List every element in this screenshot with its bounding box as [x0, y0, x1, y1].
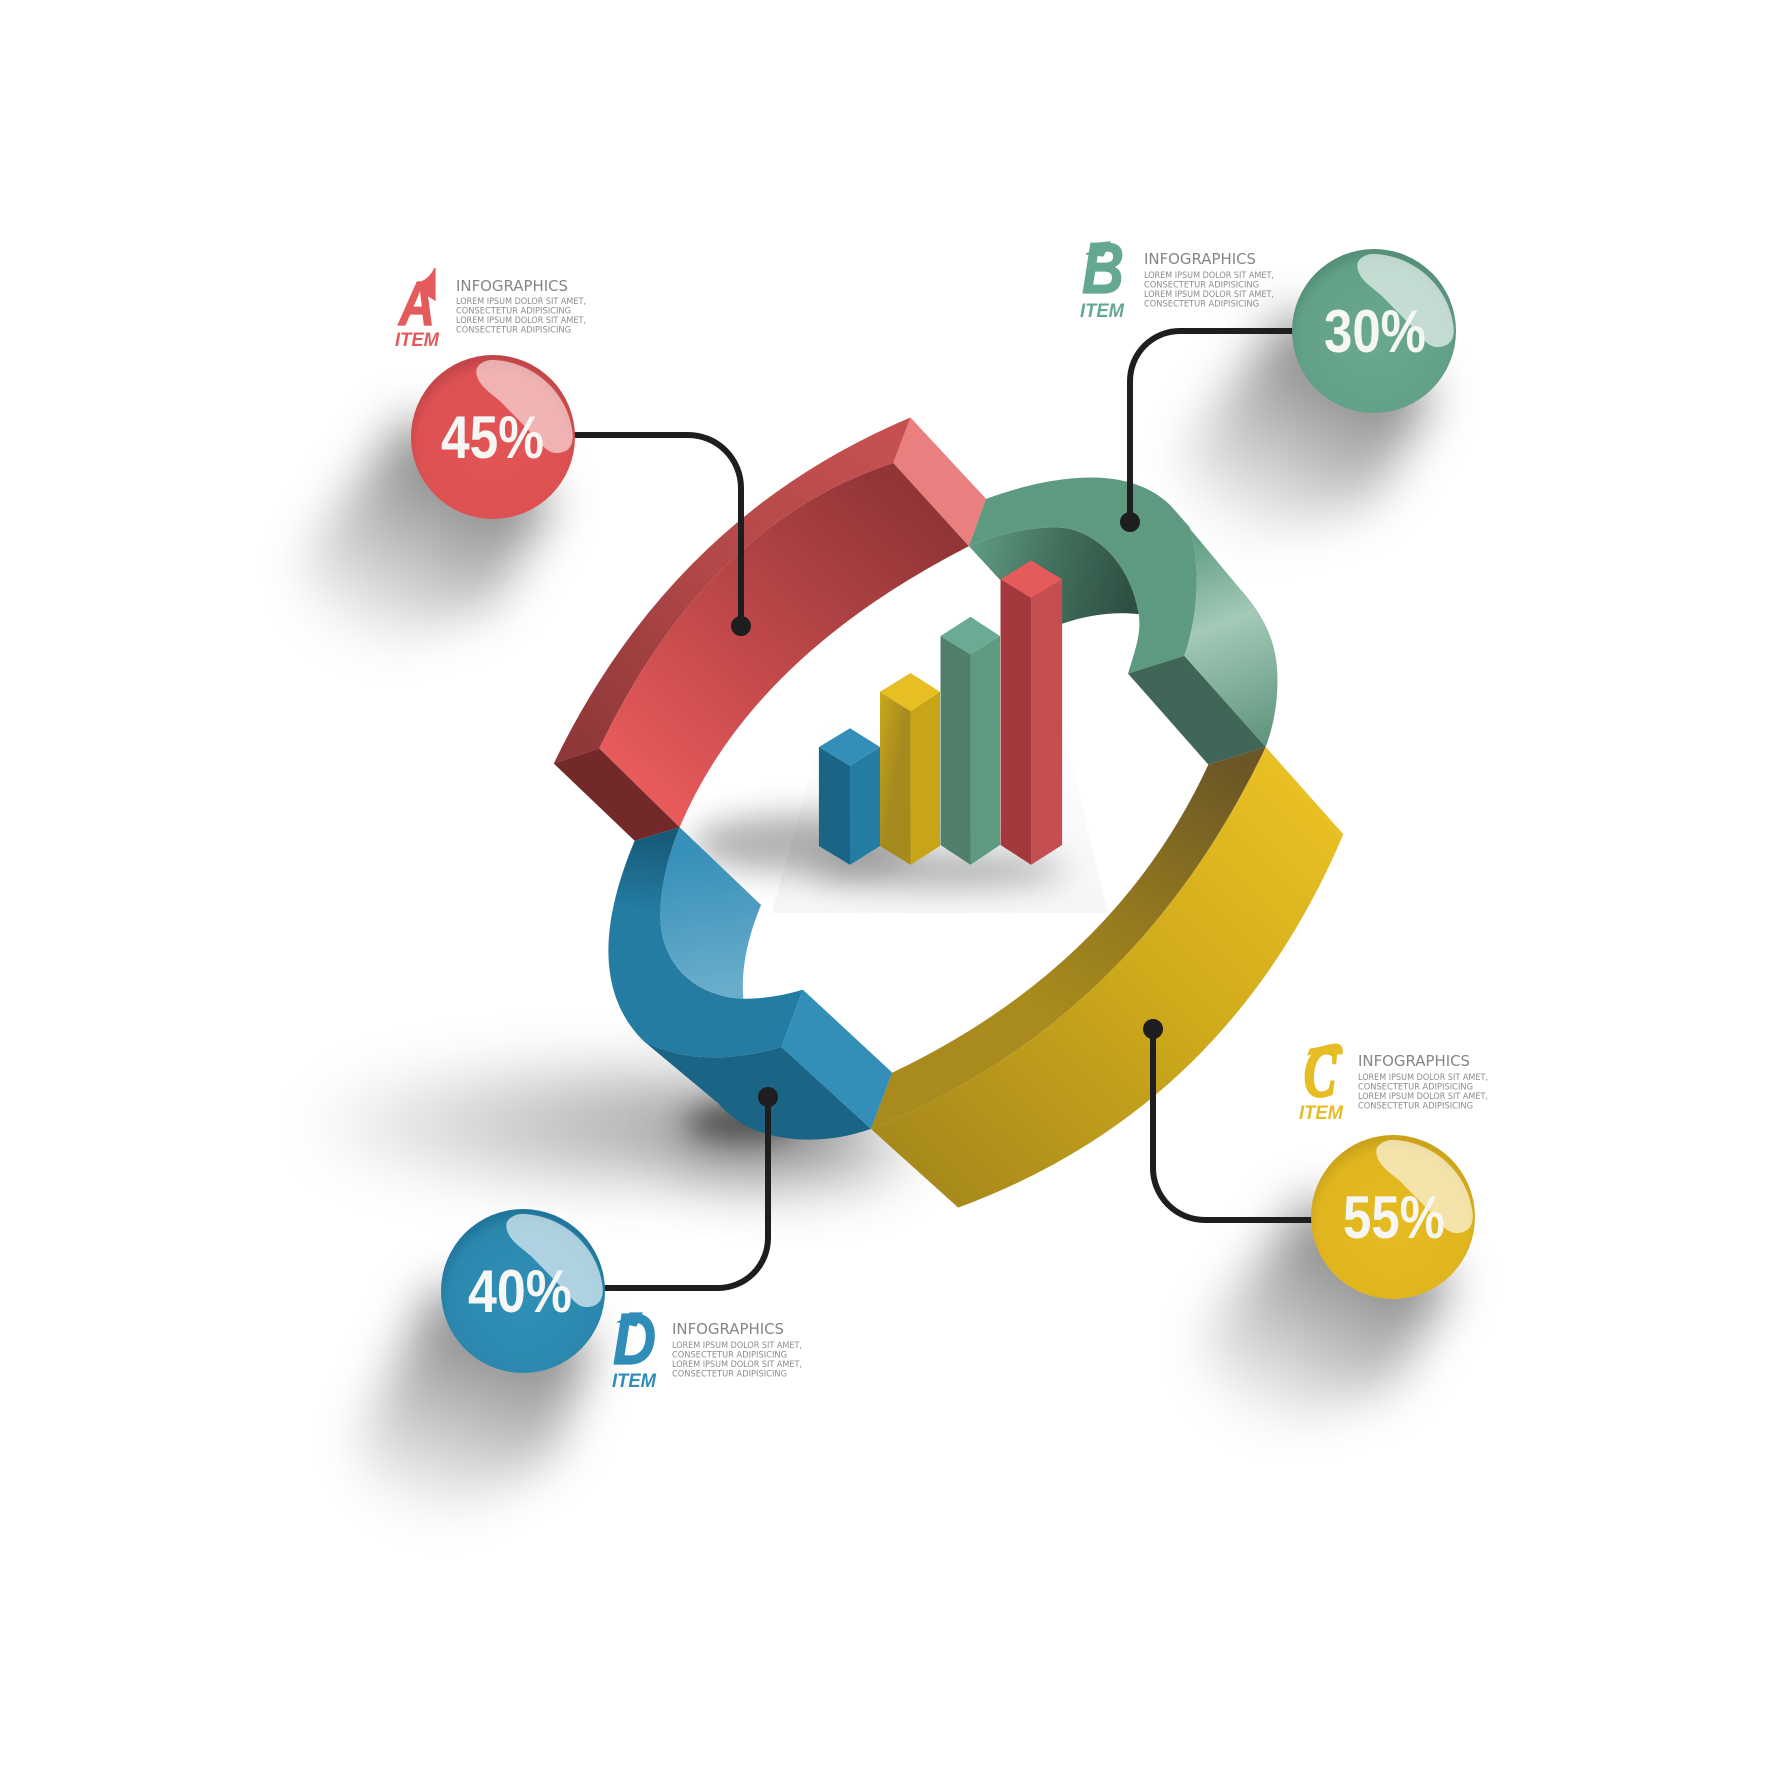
shadow: sphere D [332, 1261, 619, 1536]
green dark cap [1128, 656, 1266, 765]
shadow: sphere C [1203, 1197, 1453, 1432]
yellow main face [871, 747, 1343, 1208]
text C: INFOGRAPHICS [1358, 1052, 1470, 1070]
text D: INFOGRAPHICS [672, 1320, 784, 1338]
red outer band [554, 417, 911, 764]
sphere C 55% [1311, 1135, 1475, 1299]
letter B: B [1082, 229, 1124, 309]
label C [1299, 1035, 1488, 1124]
yellow inner band [871, 747, 1266, 1129]
sphere B 30%: 30% [1324, 298, 1426, 365]
text C: LOREM IPSUM DOLOR SIT AMET, [1358, 1092, 1488, 1102]
text B: LOREM IPSUM DOLOR SIT AMET, [1144, 271, 1274, 281]
label B [1080, 229, 1274, 322]
isometric ring and bar chart [554, 417, 1343, 1208]
letter A: A [397, 270, 435, 339]
blue light wall [660, 827, 761, 999]
bar chart [819, 561, 1062, 865]
letter C: C [1304, 1035, 1337, 1112]
shadow: sphere B [1184, 311, 1434, 546]
red bottom cap [554, 749, 680, 841]
green light band [1171, 506, 1277, 747]
sphere D 40%: 40% [468, 1258, 572, 1325]
segment: yellow [871, 747, 1343, 1208]
item C: ITEM [1299, 1102, 1344, 1124]
sphere B 30% [1292, 249, 1456, 413]
sphere C 55%: 55% [1343, 1184, 1445, 1251]
shadow: sphere A [303, 417, 553, 652]
segment: green [969, 477, 1277, 765]
text A: LOREM IPSUM DOLOR SIT AMET, [456, 297, 586, 307]
blue cap [781, 990, 892, 1129]
text A: LOREM IPSUM DOLOR SIT AMET, [456, 316, 586, 326]
text A: CONSECTETUR ADIPISICING [456, 326, 571, 336]
sphere D 40% [441, 1209, 605, 1373]
text D: CONSECTETUR ADIPISICING [672, 1370, 787, 1380]
label D [612, 1300, 802, 1392]
item A: ITEM [395, 329, 440, 351]
text A: CONSECTETUR ADIPISICING [456, 306, 571, 316]
text D: CONSECTETUR ADIPISICING [672, 1350, 787, 1360]
segment: blue [608, 827, 892, 1140]
text B: CONSECTETUR ADIPISICING [1144, 300, 1259, 310]
item B: ITEM [1080, 300, 1125, 322]
bar: green [941, 617, 1000, 865]
letter D: D [613, 1300, 656, 1380]
text B: CONSECTETUR ADIPISICING [1144, 280, 1259, 290]
bar: yellow [880, 673, 940, 865]
red front face [599, 463, 969, 827]
bar: blue [819, 728, 880, 865]
text B: INFOGRAPHICS [1144, 250, 1256, 268]
green main face [969, 477, 1197, 674]
blue main face [608, 827, 803, 1057]
label A [395, 268, 586, 351]
connector D [600, 1090, 775, 1288]
chart floor plane [772, 722, 1108, 913]
shadow: ring ground [320, 1075, 910, 1190]
sphere A 45%: 45% [441, 404, 544, 471]
text C [1358, 1052, 1488, 1112]
text A [456, 277, 586, 336]
text C: CONSECTETUR ADIPISICING [1358, 1082, 1473, 1092]
red top cap [893, 417, 986, 546]
text B [1144, 250, 1274, 310]
text D [672, 1320, 802, 1380]
green inner wall [969, 527, 1139, 624]
item D: ITEM [612, 1370, 657, 1392]
blue bottom face [644, 1042, 871, 1140]
text D: LOREM IPSUM DOLOR SIT AMET, [672, 1360, 802, 1370]
text C: LOREM IPSUM DOLOR SIT AMET, [1358, 1073, 1488, 1083]
connector B [1123, 331, 1296, 529]
chart shadow [691, 814, 1066, 885]
text C: CONSECTETUR ADIPISICING [1358, 1102, 1473, 1112]
text D: LOREM IPSUM DOLOR SIT AMET, [672, 1341, 802, 1351]
connector A [570, 435, 748, 633]
bar: red [1001, 561, 1062, 865]
connector C [1146, 1022, 1316, 1220]
sphere A 45% [411, 355, 575, 519]
segment: red [554, 417, 986, 841]
text A: INFOGRAPHICS [456, 277, 568, 295]
text B: LOREM IPSUM DOLOR SIT AMET, [1144, 290, 1274, 300]
